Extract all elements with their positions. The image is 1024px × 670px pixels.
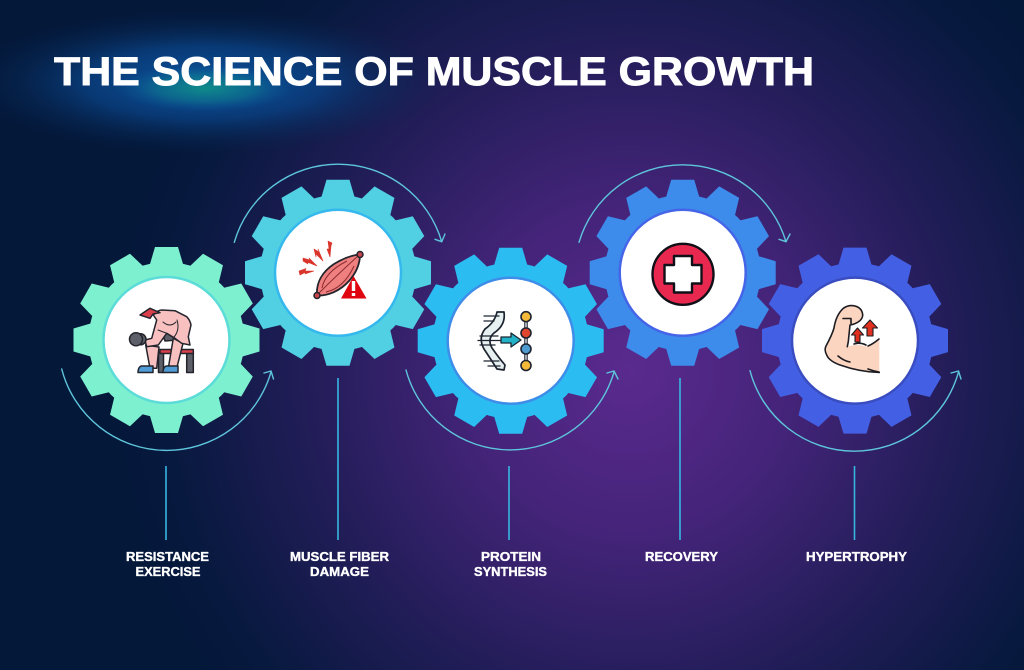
label: protein synthesis	[474, 550, 547, 579]
connector line: muscle fiber damage	[337, 378, 339, 540]
connector line: hypertrophy	[854, 466, 855, 540]
gear 3: protein synthesis	[418, 248, 604, 434]
title: THE SCIENCE OF MUSCLE GROWTH	[54, 50, 814, 94]
label: protein synthesis: PROTEIN	[481, 550, 541, 564]
title glow: blue	[0, 10, 445, 154]
icon: flexed arm	[825, 306, 879, 372]
icon: medical cross	[652, 244, 714, 305]
connector line: recovery	[679, 378, 681, 540]
label: muscle fiber damage	[290, 550, 389, 579]
arc arrow: gear 3	[406, 370, 618, 450]
icon: weightlifter	[130, 308, 193, 372]
icon: torn muscle	[299, 241, 366, 298]
label: resistance exercise: RESISTANCE	[126, 550, 209, 564]
gear 5: hypertrophy	[762, 248, 948, 434]
gear 4: recovery	[590, 180, 776, 366]
icon: dna to amino acid chain	[478, 312, 531, 370]
arc arrow: gear 1	[62, 369, 274, 450]
arc arrow: gear 5	[750, 371, 961, 451]
arc arrow: gear 4	[579, 165, 790, 242]
label: resistance exercise: EXERCISE	[136, 565, 200, 579]
label: muscle fiber damage: DAMAGE	[310, 565, 369, 579]
gear 1: resistance exercise	[74, 247, 260, 433]
label: recovery: RECOVERY	[645, 550, 719, 564]
label: muscle fiber damage: MUSCLE FIBER	[290, 550, 389, 564]
arc arrow: gear 2	[234, 164, 445, 242]
label: protein synthesis: SYNTHESIS	[474, 565, 547, 579]
connector line: resistance exercise	[165, 466, 167, 540]
connector line: protein synthesis	[508, 466, 510, 540]
label: hypertrophy: HYPERTROPHY	[806, 550, 908, 564]
gear 2: muscle fiber damage	[245, 180, 431, 366]
title glow: teal	[115, 64, 295, 112]
label: resistance exercise	[126, 550, 209, 579]
